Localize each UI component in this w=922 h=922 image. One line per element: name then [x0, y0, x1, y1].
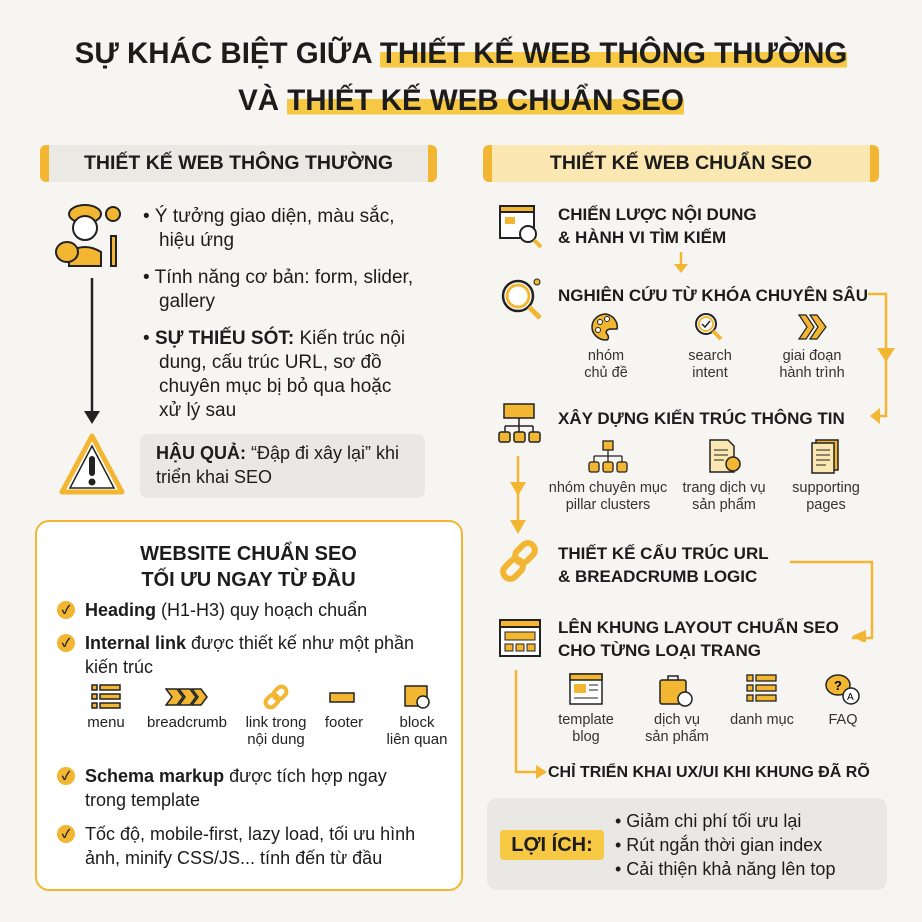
connector: step4 to step5	[790, 560, 874, 642]
step 3 sub-items: supporting	[792, 480, 860, 496]
step 1 heading	[558, 204, 757, 247]
check list 2: ✓	[62, 769, 70, 783]
consequence box: HẬU QUẢ: “Đập đi xây lại” khi triển khai SEO	[156, 443, 399, 487]
step 5 sub-items: blog	[572, 729, 600, 745]
icon row: internal link types: breadcrumb	[147, 714, 227, 731]
icon row: internal link types: block	[399, 714, 435, 731]
step 3 sub-items: pillar clusters	[566, 497, 650, 513]
header: right column: THIẾT KẾ WEB CHUẨN SEO	[550, 152, 812, 174]
check list: ✓	[62, 636, 70, 650]
step 5 sub-items: ?	[834, 678, 842, 693]
step 2 sub-items: chủ đề	[584, 365, 628, 381]
arrow: step1 to step2	[674, 252, 688, 273]
step 2 sub-items	[584, 313, 845, 381]
step 3 sub-items: sản phẩm	[692, 497, 756, 513]
check list: Internal link được thiết kế như một phần	[85, 633, 414, 653]
icon: warning	[60, 434, 124, 494]
check list: ✓	[62, 603, 70, 617]
final step heading: CHỈ TRIỂN KHAI UX/UI KHI KHUNG ĐÃ RÕ	[548, 764, 870, 781]
arrow: step3 to step4	[510, 456, 526, 534]
check list 2: Tốc độ, mobile-first, lazy load, tối ưu hình	[85, 824, 415, 844]
step 2 heading: NGHIÊN CỨU TỪ KHÓA CHUYÊN SÂU	[558, 286, 868, 305]
connector: step2 to step3	[868, 292, 895, 424]
arrow: left down	[84, 278, 100, 424]
step 3 sub-items: pages	[806, 497, 846, 513]
step 5 sub-items: template	[558, 712, 614, 728]
title: VÀ THIẾT KẾ WEB CHUẨN SEO	[238, 84, 684, 117]
panel: website chuẩn SEO	[35, 520, 463, 891]
left bullets: • Ý tưởng giao diện, màu sắc,	[143, 206, 395, 227]
check list	[57, 600, 414, 677]
step 2 sub-items: intent	[692, 365, 728, 381]
check list 2: ✓	[62, 827, 70, 841]
benefits list	[615, 811, 835, 879]
left bullets	[143, 205, 413, 421]
step 1 heading: & HÀNH VI TÌM KIẾM	[558, 228, 726, 247]
step 5 sub-items: danh mục	[730, 712, 794, 728]
arrow: step5 to final	[514, 670, 547, 779]
icon: layout	[499, 619, 541, 657]
step 3 heading: XÂY DỰNG KIẾN TRÚC THÔNG TIN	[558, 409, 845, 428]
step 5 sub-items: A	[847, 692, 854, 703]
benefits list: • Giảm chi phí tối ưu lại	[615, 811, 801, 831]
step 3 sub-items	[549, 439, 860, 513]
icon: link chain	[500, 540, 538, 582]
check list: kiến trúc	[85, 657, 153, 677]
icon row: internal link types: link trong	[246, 714, 306, 731]
left bullets: • SỰ THIẾU SÓT: Kiến trúc nội	[143, 328, 405, 349]
title	[75, 36, 847, 117]
benefits list: • Cải thiện khả năng lên top	[615, 859, 835, 879]
benefits label	[500, 830, 604, 860]
step 1 heading: CHIẾN LƯỢC NỘI DUNG	[558, 205, 757, 224]
icon: information architecture	[498, 403, 541, 443]
step 2 sub-items: search	[688, 348, 732, 364]
check list 2: ảnh, minify CSS/JS... tính đến từ đầu	[85, 848, 382, 868]
check list: Heading (H1-H3) quy hoạch chuẩn	[85, 600, 367, 620]
left bullets: gallery	[159, 291, 215, 312]
check list 2: Schema markup được tích hợp ngay	[85, 766, 387, 786]
left bullets: chuyên mục bị bỏ qua hoặc	[159, 376, 391, 397]
step 3 sub-items: nhóm chuyên mục	[549, 480, 667, 496]
step 5 heading	[558, 618, 839, 660]
icon: artist	[55, 204, 121, 267]
step 4 heading: & BREADCRUMB LOGIC	[558, 567, 757, 586]
icon row: internal link types: footer	[325, 714, 363, 731]
left bullets: xử lý sau	[159, 400, 236, 421]
header: left column	[40, 145, 437, 182]
step 2 sub-items: hành trình	[779, 365, 845, 381]
check list 2: trong template	[85, 790, 200, 810]
step 5 sub-items: dịch vụ	[654, 712, 700, 728]
benefits list: • Rút ngắn thời gian index	[615, 835, 822, 855]
panel heading: WEBSITE CHUẨN SEO	[140, 543, 357, 565]
step 5 heading: LÊN KHUNG LAYOUT CHUẨN SEO	[558, 618, 839, 637]
header: left column: THIẾT KẾ WEB THÔNG THƯỜNG	[84, 152, 393, 174]
benefits box	[487, 798, 887, 890]
left bullets: • Tính năng cơ bản: form, slider,	[143, 267, 413, 288]
header: right column	[483, 145, 879, 182]
icon row: internal link types: menu	[87, 714, 125, 731]
step 5 sub-items: sản phẩm	[645, 729, 709, 745]
left bullets: dung, cấu trúc URL, sơ đồ	[159, 352, 382, 373]
step 2 sub-items: giai đoạn	[783, 348, 841, 364]
panel heading	[140, 542, 357, 591]
step 2 sub-items: nhóm	[588, 348, 624, 364]
icon row: internal link types: liên quan	[387, 731, 447, 748]
benefits label: LỢI ÍCH:	[511, 834, 593, 856]
left bullets: hiệu ứng	[159, 230, 234, 251]
step 5 sub-items: FAQ	[828, 712, 858, 728]
title: SỰ KHÁC BIỆT GIỮA THIẾT KẾ WEB THÔNG THƯỜNG	[75, 37, 847, 70]
check list 2	[57, 766, 415, 868]
icon row: internal link types: nội dung	[247, 731, 305, 748]
consequence box	[140, 434, 425, 498]
icon: content strategy	[499, 205, 542, 248]
step 5 heading: CHO TỪNG LOẠI TRANG	[558, 641, 761, 660]
icon row: internal link types	[87, 684, 447, 748]
step 5 sub-items	[558, 673, 860, 745]
step 4 heading	[558, 544, 769, 586]
step 3 sub-items: trang dịch vụ	[682, 480, 766, 496]
icon: keyword research	[502, 278, 542, 320]
step 4 heading: THIẾT KẾ CẤU TRÚC URL	[558, 544, 769, 563]
panel heading: TỐI ƯU NGAY TỪ ĐẦU	[141, 569, 356, 591]
